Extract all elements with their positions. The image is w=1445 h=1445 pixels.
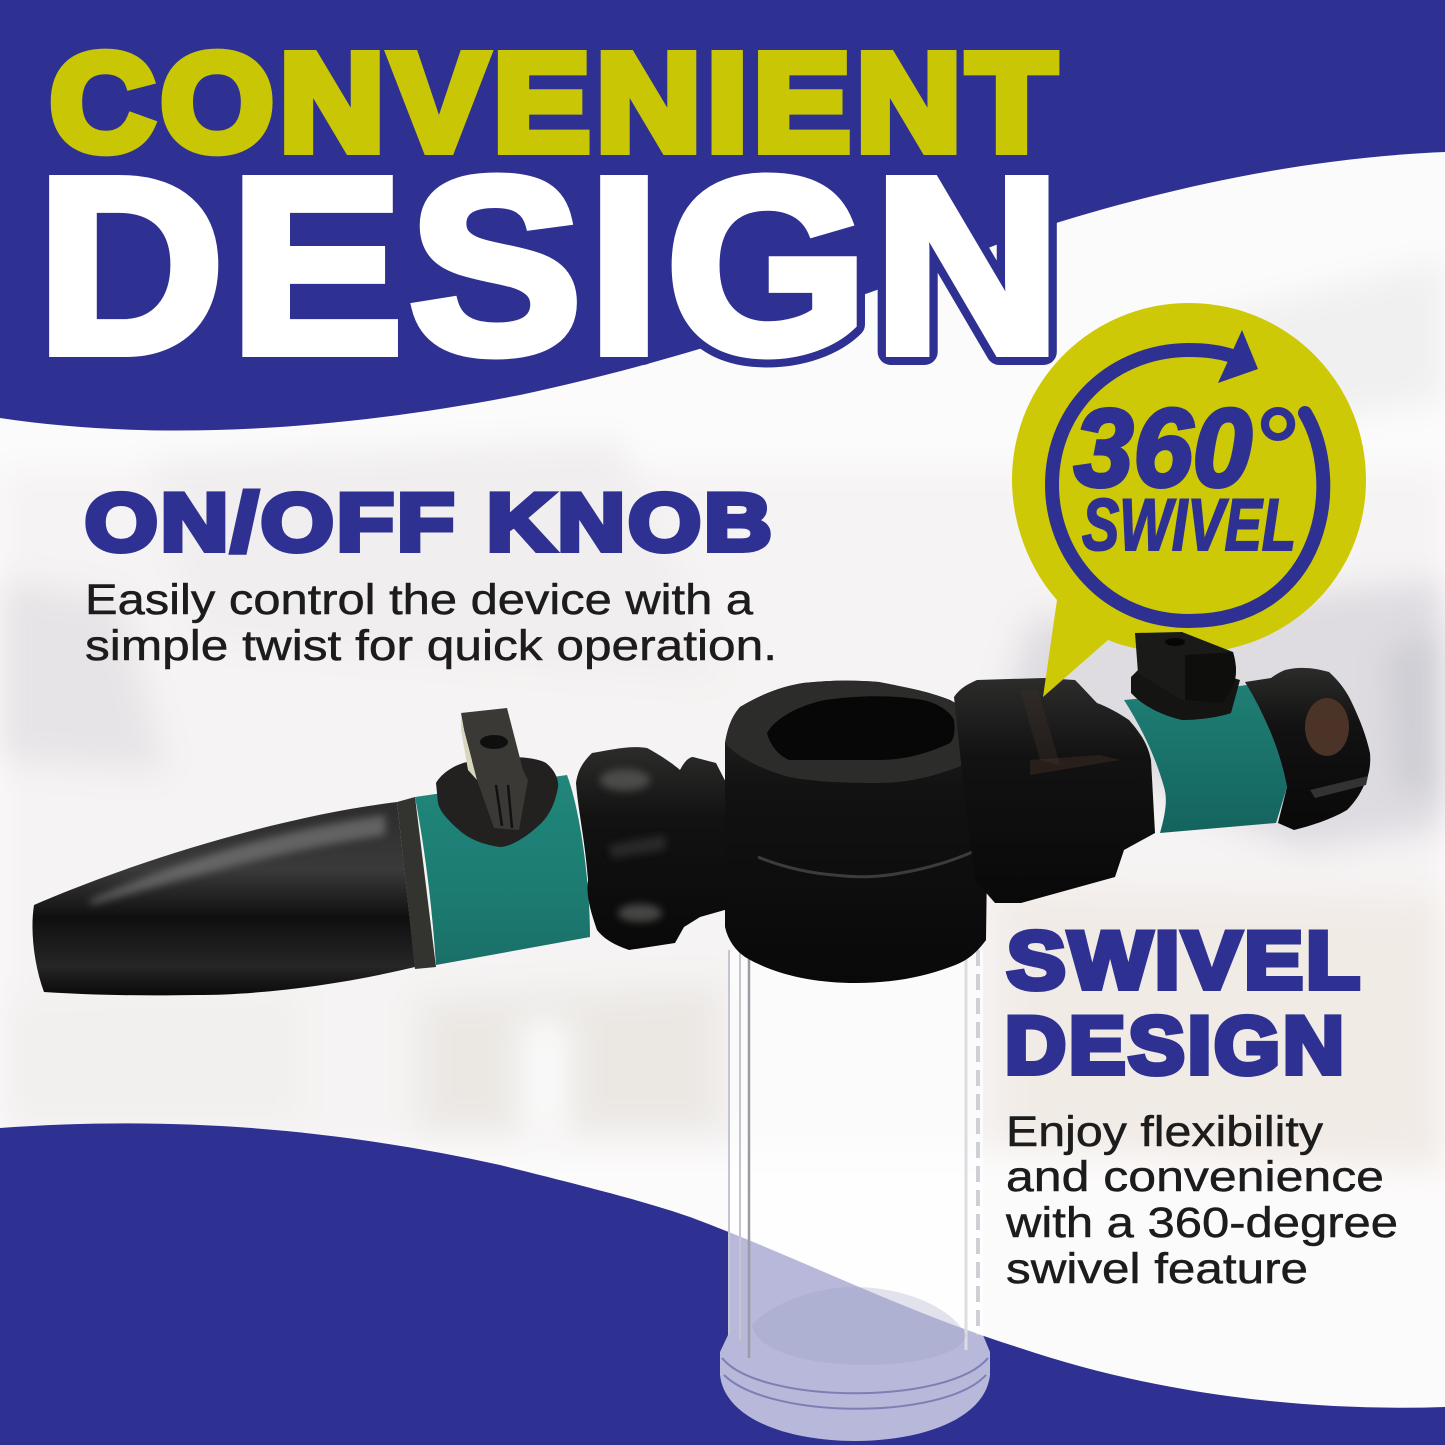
text: on/off description: simple twist for quick operation. [85,622,777,670]
heading: swivel design [1005,916,1363,1091]
text: swivel description: with a 360-degree [1005,1199,1398,1247]
text: on/off description [85,576,777,670]
arrow head [1218,330,1258,383]
connector brown spot [1305,698,1349,756]
title: design: DESIGN [37,126,1067,405]
product: sprayer [32,668,1370,1441]
degree sign: ° [1256,385,1300,508]
swivel body [725,681,988,983]
heading: on/off knob: ON/OFF KNOB [85,478,775,568]
nozzle ring [397,797,436,969]
left knob handle [461,708,528,830]
bottom blue wave [0,1123,1445,1445]
left collar [576,747,760,950]
right collar [954,678,1155,903]
text: swivel description [1005,1108,1398,1293]
right knob [1131,632,1240,720]
text: swivel description: Enjoy flexibility [1006,1108,1324,1156]
top blue wave [0,0,1445,431]
title: convenient: CONVENIENT [50,26,1062,180]
swivel label: SWIVEL [1082,485,1296,566]
badge: 360 swivel [1012,303,1366,697]
nozzle [32,802,415,995]
left collar highlights [600,769,665,922]
clear canister [720,950,990,1441]
left knob base [436,757,558,847]
speech bubble [1012,303,1366,697]
swivel seam [758,850,977,877]
text: swivel description: swivel feature [1006,1245,1308,1293]
360 label: 360 [1074,387,1252,510]
nozzle highlights [90,815,385,905]
swivel ring and arrow [1052,350,1323,621]
text: on/off description: Easily control the device with a [85,576,753,624]
heading: swivel design: SWIVEL [1007,916,1363,1006]
right collar highlights [1020,690,1060,765]
text: swivel description: and convenience [1006,1153,1384,1201]
right connector [1245,668,1370,830]
connector clip [1310,776,1368,798]
left teal valve [415,775,590,965]
title: design: DESIGN [37,126,1067,405]
swivel top ring [725,681,986,783]
right teal valve [1124,685,1287,833]
heading: swivel design: DESIGN [1005,1001,1347,1091]
swivel opening [767,696,955,760]
